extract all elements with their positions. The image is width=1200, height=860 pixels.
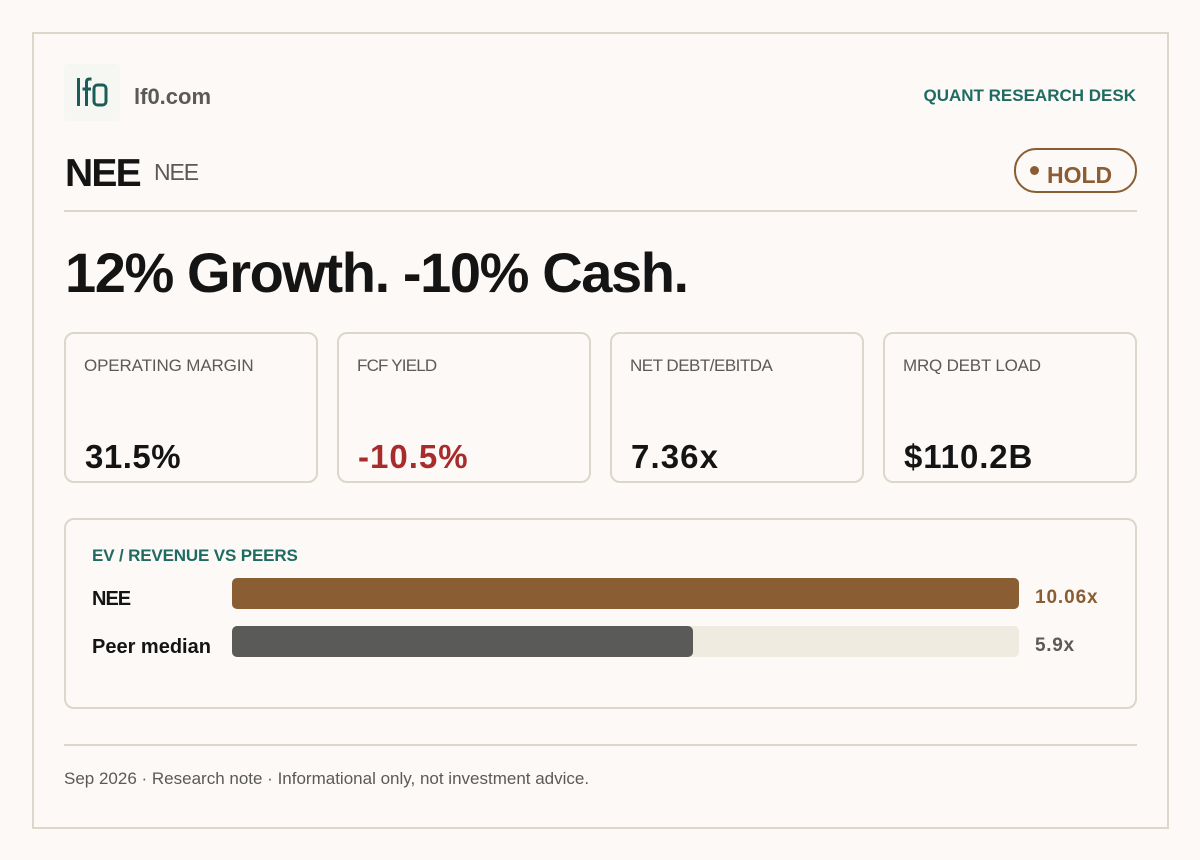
ticker heading: NEE <box>65 152 140 195</box>
desk label: QUANT RESEARCH DESK <box>923 86 1136 105</box>
header: brand logo and site name <box>77 78 211 109</box>
bar track: peer median <box>232 626 1019 657</box>
label: NET DEBT/EBITDA <box>630 356 772 375</box>
value: NEE: 10.06x <box>1035 587 1099 608</box>
panel: ev/revenue vs peers <box>64 518 1137 709</box>
footer divider <box>64 744 1137 746</box>
site name: lf0.com <box>134 84 211 109</box>
label: MRQ DEBT LOAD <box>903 356 1041 375</box>
icon: lf0 logo tile <box>64 64 120 121</box>
row label: NEE: NEE <box>92 588 130 610</box>
ticker subtitle: NEE <box>154 159 198 185</box>
badge dot <box>1030 166 1039 175</box>
chart heading: EV / REVENUE VS PEERS <box>92 546 298 565</box>
label: OPERATING MARGIN <box>84 356 254 375</box>
value: 31.5% <box>85 438 181 475</box>
row label: peer median: Peer median <box>92 636 211 658</box>
bar: NEE <box>232 578 1019 609</box>
footer note: Sep 2026 · Research note · Informational only, not investment advice. <box>64 769 589 788</box>
value: $110.2B <box>904 438 1033 475</box>
value: 7.36x <box>631 438 719 475</box>
badge text: HOLD <box>1047 162 1112 188</box>
value: peer median: 5.9x <box>1035 635 1075 656</box>
panel: net debt/ebitda <box>610 332 864 483</box>
headline: 12% Growth. -10% Cash. <box>65 241 688 304</box>
panel: mrq debt load <box>883 332 1137 483</box>
value: -10.5% <box>358 438 469 475</box>
panel: fcf yield <box>337 332 591 483</box>
label: FCF YIELD <box>357 356 436 375</box>
rating badge: hold <box>1014 148 1137 193</box>
panel: operating margin <box>64 332 318 483</box>
header divider <box>64 210 1137 212</box>
bar fill: peer median <box>232 626 693 657</box>
